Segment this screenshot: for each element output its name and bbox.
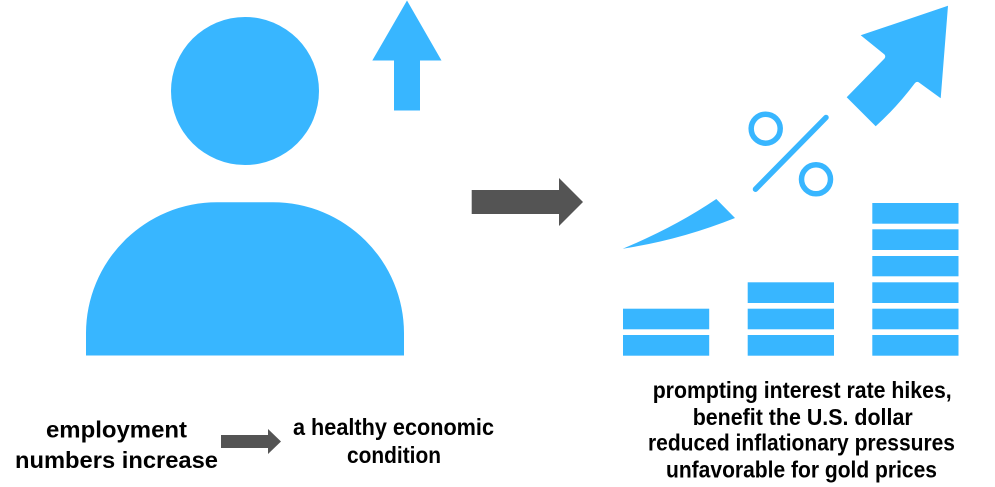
text: consequences: prompting interest rate hikes, <box>653 377 952 403</box>
person body <box>86 202 404 356</box>
icon: up arrow <box>372 0 442 110</box>
text: consequences: benefit the U.S. dollar <box>693 404 913 430</box>
icon: rising interest rate <box>623 6 948 249</box>
text: consequences: reduced inflationary pressures <box>648 430 955 456</box>
stack 3 <box>872 203 958 356</box>
stack 2 <box>748 282 834 356</box>
percent bottom circle <box>802 165 830 194</box>
text: consequences <box>648 377 955 482</box>
text: consequences: unfavorable for gold prices <box>666 456 937 482</box>
text: a healthy economic condition: condition <box>347 442 441 468</box>
stack 1 <box>623 309 709 356</box>
bar chart: coin stacks <box>623 203 958 356</box>
person head <box>171 17 319 165</box>
text: employment numbers increase: employment <box>46 416 187 442</box>
main arrow <box>472 178 583 226</box>
text: employment numbers increase <box>15 416 218 473</box>
small arrow <box>221 429 281 454</box>
text: a healthy economic condition <box>293 414 494 468</box>
growth arrow tail <box>623 199 735 249</box>
percent slash <box>756 118 826 189</box>
text: employment numbers increase: numbers increase <box>15 447 218 473</box>
text: a healthy economic condition: a healthy economic <box>293 414 494 440</box>
icon: person <box>86 17 404 356</box>
percent top circle <box>751 114 780 143</box>
growth arrow head <box>847 6 948 126</box>
percent sign <box>751 114 830 194</box>
